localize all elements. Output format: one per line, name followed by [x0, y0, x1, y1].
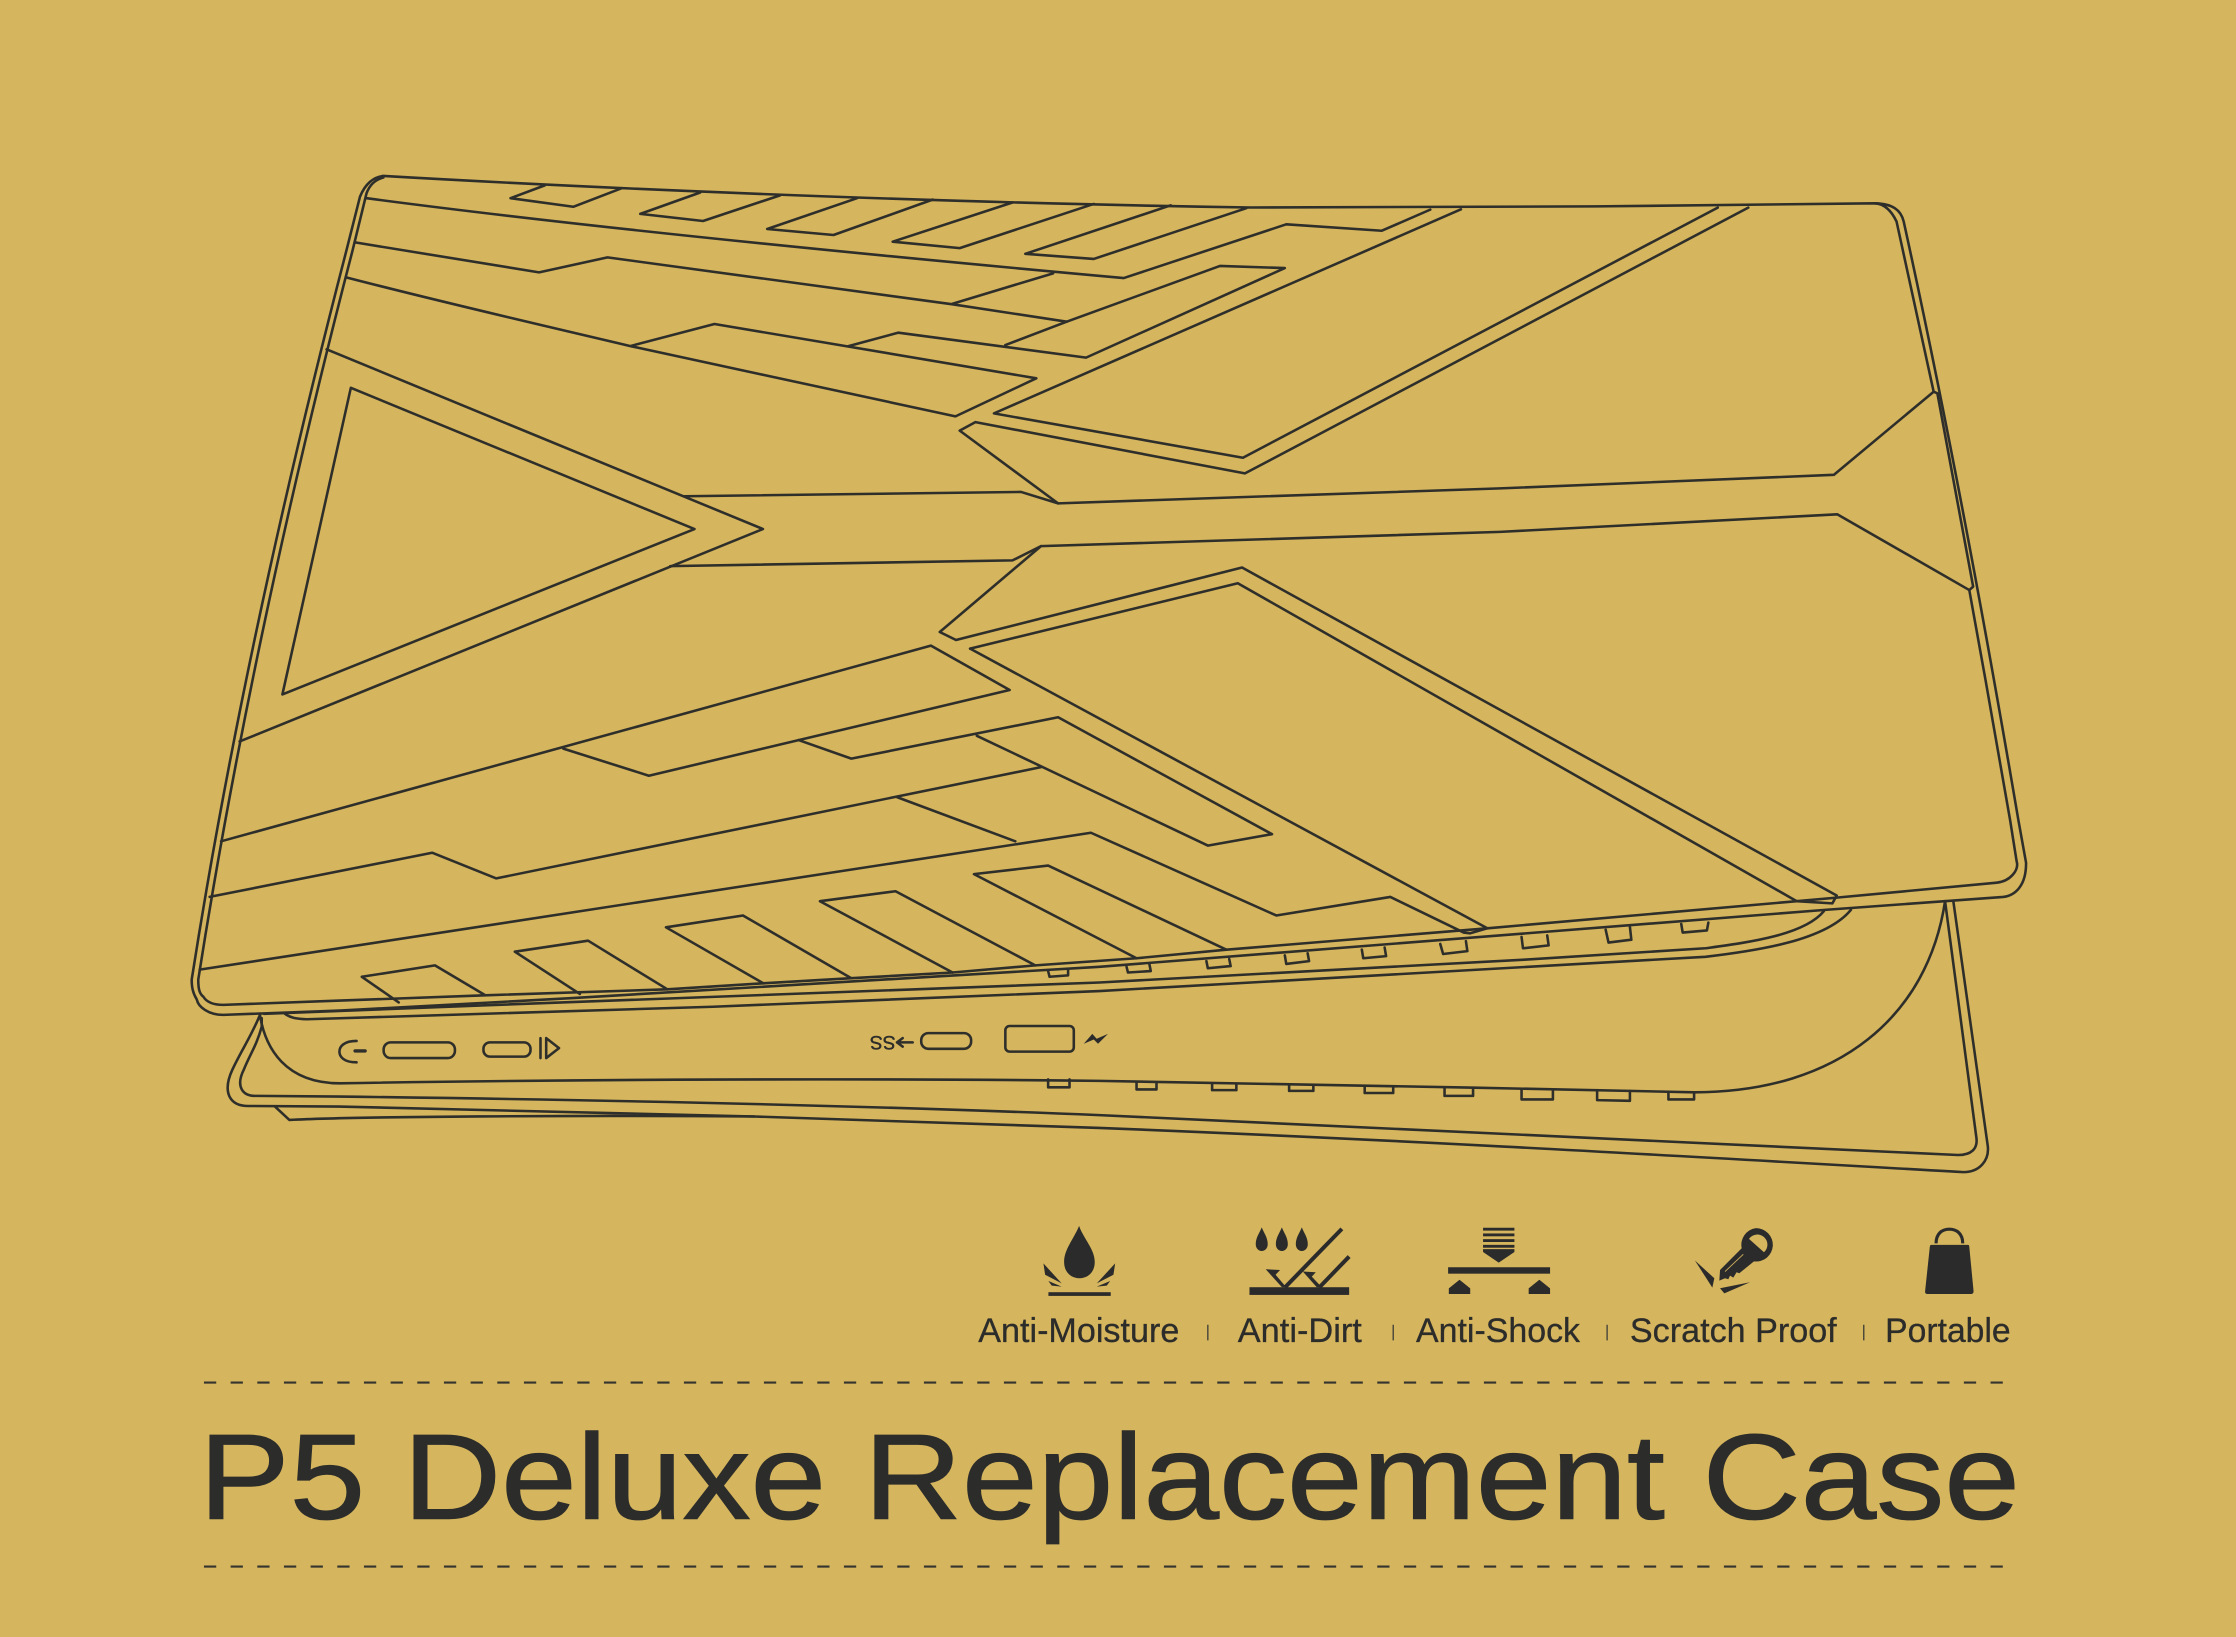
- dashed rule top: [204, 1382, 2008, 1384]
- console side tabs upper: [1048, 923, 1708, 977]
- icon: portable bag: [1925, 1229, 1974, 1294]
- feature labels: [978, 1312, 2011, 1350]
- lower shell outline: [228, 901, 1988, 1172]
- top edge notches: [511, 185, 1246, 259]
- label: anti-dirt: Anti-Dirt: [1238, 1312, 1362, 1350]
- console side tabs lower: [1048, 1079, 1694, 1101]
- title: P5 Deluxe Replacement Case: [199, 1409, 2020, 1545]
- feature icons row: [1043, 1226, 1974, 1296]
- label: portable: Portable: [1885, 1312, 2011, 1350]
- icon: scratch proof key: [1695, 1228, 1773, 1293]
- dashed rule bottom: [204, 1566, 2008, 1568]
- usb c slot: [921, 1033, 971, 1049]
- headphone dash: [355, 1050, 365, 1052]
- icon: anti-dirt drops and checks: [1249, 1227, 1349, 1295]
- label separators: [1208, 1325, 1864, 1340]
- label: scratch proof: Scratch Proof: [1630, 1312, 1837, 1350]
- usb a slot: [384, 1042, 455, 1058]
- icon: anti-shock impact: [1448, 1228, 1550, 1294]
- small slot: [483, 1042, 531, 1057]
- usb label mirrored: SS: [870, 1031, 896, 1052]
- disc eject symbol: [540, 1038, 559, 1058]
- cover inner outline: [198, 178, 2017, 1005]
- lower panel grooves: [200, 646, 1487, 970]
- bottom edge vent panels: [362, 866, 1226, 1002]
- icon: anti-moisture drop: [1043, 1226, 1115, 1296]
- label: anti-shock: Anti-Shock: [1416, 1312, 1581, 1350]
- bolt symbol: [1084, 1034, 1108, 1044]
- headphone symbol: [339, 1041, 357, 1062]
- console side inner rails: [264, 910, 1851, 1019]
- illustration: console with replacement cover: [192, 176, 2026, 1172]
- power slot: [1005, 1026, 1074, 1052]
- ports and labels: [339, 1026, 1074, 1062]
- label: anti-moisture: Anti-Moisture: [978, 1312, 1179, 1350]
- console side curve: [260, 901, 1945, 1092]
- arrow symbol: [897, 1038, 913, 1047]
- upper panel grooves: [346, 198, 1934, 503]
- cover outer outline: [192, 176, 2026, 1015]
- arrow panel left: [240, 349, 1969, 903]
